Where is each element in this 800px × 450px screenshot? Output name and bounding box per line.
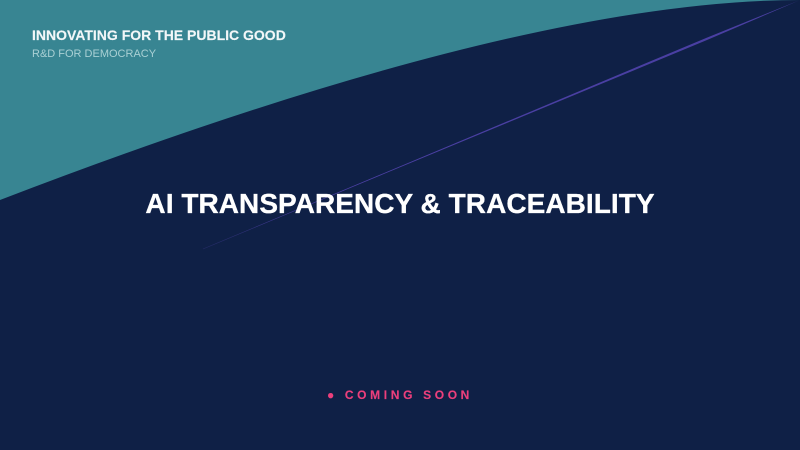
status: coming soon: ● COMING SOON bbox=[327, 388, 473, 402]
main title: AI TRANSPARENCY & TRACEABILITY bbox=[145, 188, 655, 219]
organisation heading: INNOVATING FOR THE PUBLIC GOOD bbox=[32, 27, 286, 43]
organisation subheading: R&D FOR DEMOCRACY bbox=[32, 48, 156, 60]
teal curved header shape bbox=[0, 0, 800, 200]
diagonal light streak bbox=[203, 0, 799, 249]
